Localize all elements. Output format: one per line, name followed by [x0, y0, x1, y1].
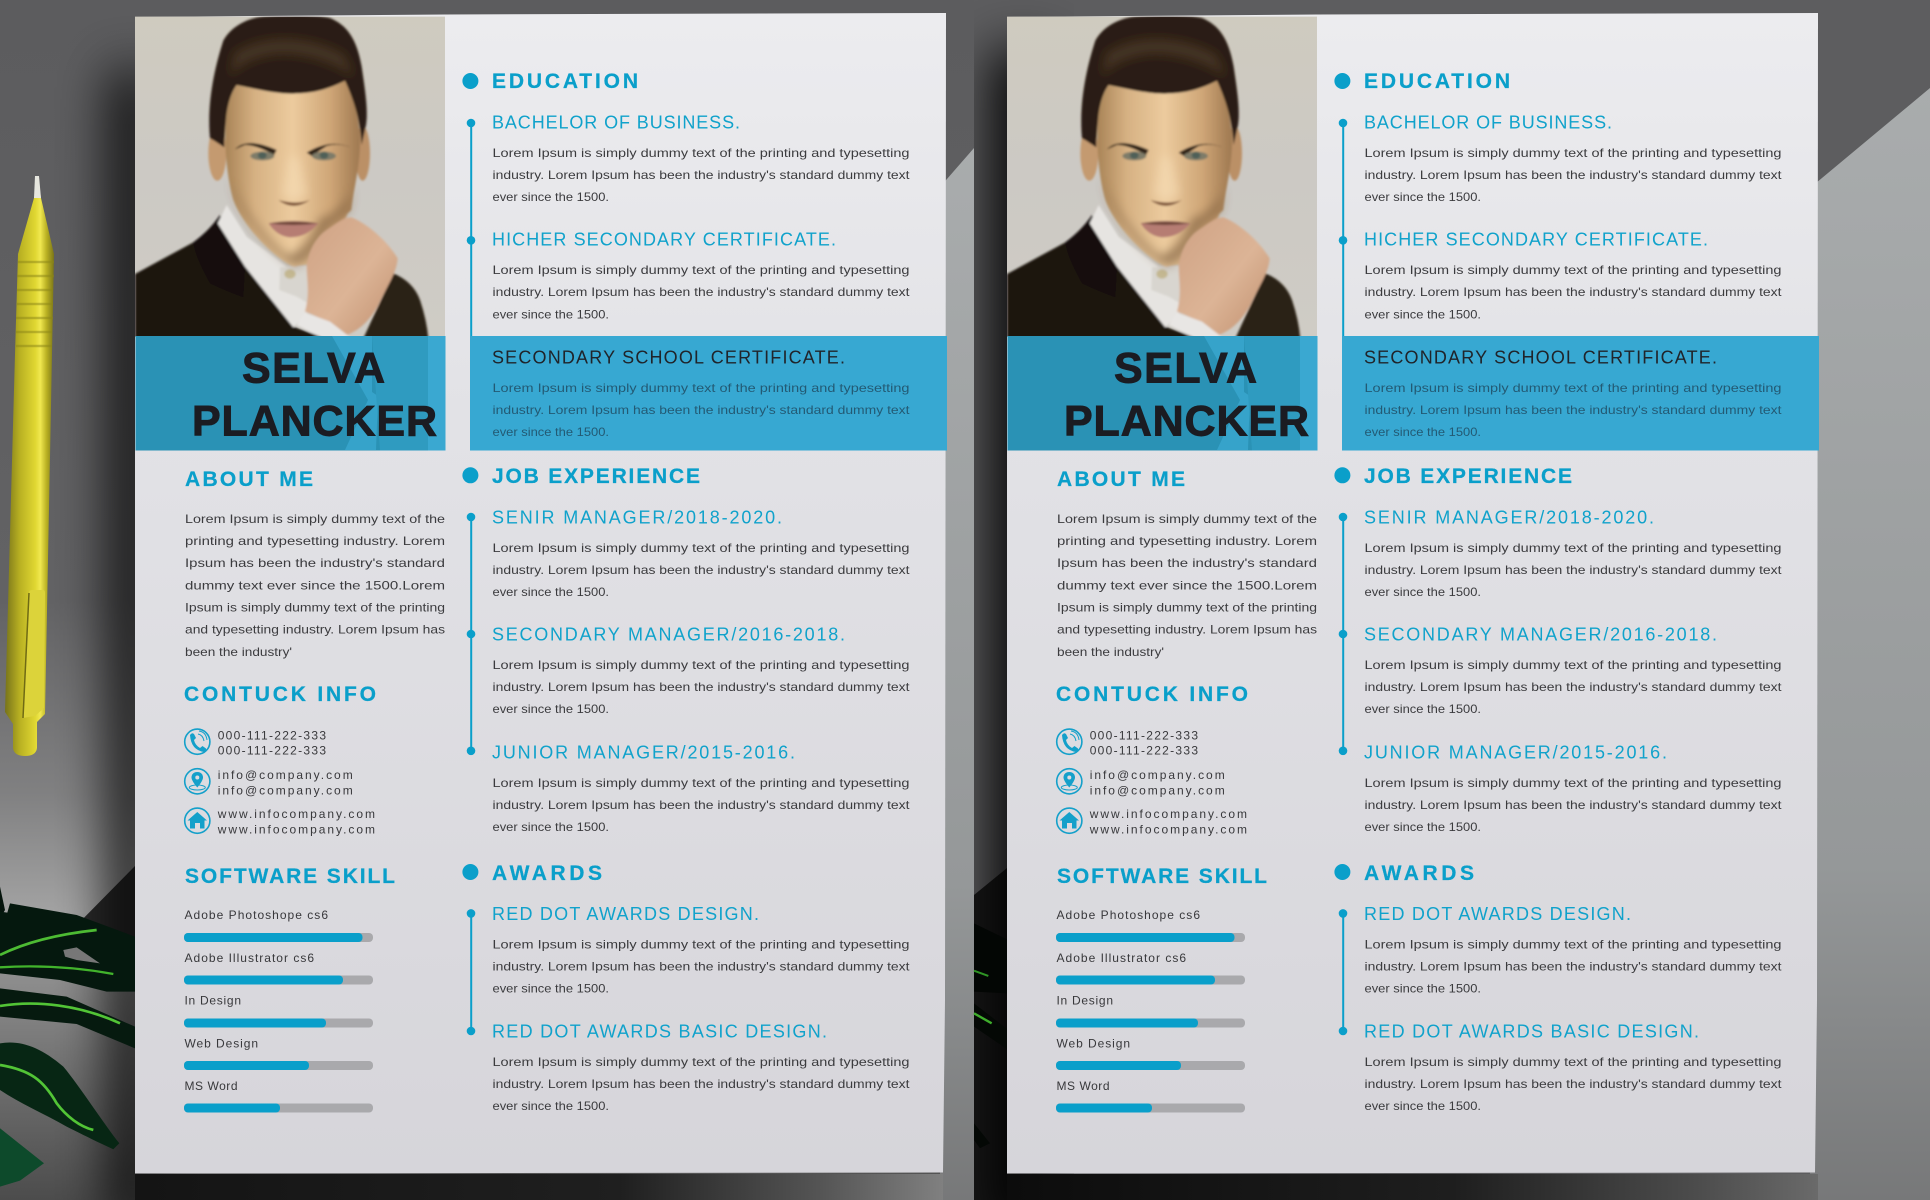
entry: secondary manager: Lorem Ipsum is simply dummy text of the printing and typesetting — [492, 658, 910, 672]
entry: red dot basic design: industry. Lorem Ipsum has been the industry's standard dummy text — [492, 1077, 910, 1091]
entry: bachelor — [492, 113, 910, 204]
text: phone numbers — [1090, 728, 1198, 758]
highlight band behind third education item — [1342, 336, 1819, 450]
text: websites: www.infocompany.com — [1089, 807, 1247, 821]
entry: red dot basic design: ever since the 1500. — [492, 1099, 609, 1113]
entry: higher secondary: industry. Lorem Ipsum has been the industry's standard dummy text — [1364, 285, 1782, 299]
entry: red dot basic design: industry. Lorem Ipsum has been the industry's standard dummy text — [1364, 1077, 1782, 1091]
section: about me — [1057, 468, 1317, 659]
entry: higher secondary: ever since the 1500. — [492, 307, 609, 321]
entry: junior manager — [492, 742, 910, 834]
timeline: job experience — [462, 467, 478, 755]
background: light diagonal wedge, right mockup — [1810, 88, 1930, 1200]
entry: junior manager: Lorem Ipsum is simply dummy text of the printing and typesetting — [492, 776, 910, 790]
entry: secondary manager: SECONDARY MANAGER/2016-2018. — [492, 625, 845, 645]
skill: ms word — [184, 1079, 373, 1112]
entry: higher secondary: industry. Lorem Ipsum has been the industry's standard dummy text — [492, 285, 910, 299]
heading: job experience: JOB EXPERIENCE — [1364, 465, 1572, 488]
entry: secondary manager — [1364, 625, 1782, 716]
entry: secondary school: ever since the 1500. — [492, 425, 609, 439]
panel: right resume sheet — [1007, 13, 1819, 1174]
timeline: education — [1334, 73, 1350, 336]
heading: job experience: JOB EXPERIENCE — [492, 465, 700, 488]
skill: ms word: MS Word — [1056, 1079, 1110, 1093]
text: emails: info@company.com — [218, 768, 353, 782]
entry: higher secondary: Lorem Ipsum is simply dummy text of the printing and typesetting — [1364, 263, 1782, 277]
text block: about me: Ipsum is simply dummy text of the printing — [1057, 600, 1317, 614]
entry: red dot design: Lorem Ipsum is simply dummy text of the printing and typesetting — [1364, 937, 1782, 951]
entry: red dot basic design: RED DOT AWARDS BASIC DESIGN. — [1364, 1021, 1699, 1041]
text: websites: www.infocompany.com — [1089, 822, 1247, 836]
heading: software skill: SOFTWARE SKILL — [185, 865, 395, 888]
icon: monstera leaf behind right mockup — [974, 923, 1008, 1148]
text: emails: info@company.com — [1090, 783, 1225, 797]
text: phone numbers: 000-111-222-333 — [1090, 728, 1198, 742]
entry: junior manager: ever since the 1500. — [492, 820, 609, 834]
text: websites — [1089, 807, 1247, 836]
heading: awards: AWARDS — [1364, 862, 1474, 885]
entry: red dot basic design: RED DOT AWARDS BASIC DESIGN. — [492, 1021, 827, 1041]
text block: about me: dummy text ever since the 1500.Lorem — [1057, 578, 1317, 592]
entry: red dot design: industry. Lorem Ipsum has been the industry's standard dummy text — [1364, 959, 1782, 973]
background: dark desk surface — [0, 0, 974, 1200]
text block: about me: and typesetting industry. Lorem Ipsum has — [1057, 623, 1317, 637]
skill: in design: In Design — [1056, 994, 1113, 1008]
entry: bachelor — [1364, 113, 1782, 204]
heading: about me: ABOUT ME — [1057, 468, 1185, 491]
section: contact info — [184, 683, 376, 836]
paper sheet — [135, 13, 946, 1174]
text block: about me: Ipsum has been the industry's standard — [1057, 556, 1317, 570]
heading: about me: ABOUT ME — [185, 468, 313, 491]
entry: bachelor: Lorem Ipsum is simply dummy text of the printing and typesetting — [1364, 146, 1782, 160]
section: software skill — [1056, 865, 1267, 1112]
section: education — [462, 70, 910, 439]
name heading: SELVA — [242, 345, 385, 393]
entry: secondary manager: ever since the 1500. — [1364, 702, 1481, 716]
skill: illustrator: Adobe Illustrator cs6 — [1056, 951, 1186, 965]
heading: awards: AWARDS — [492, 862, 602, 885]
icon: monstera leaf left — [0, 887, 135, 1187]
text block: about me — [1057, 512, 1317, 659]
entry: red dot design: ever since the 1500. — [492, 982, 609, 996]
icon: house — [185, 808, 210, 833]
entry: senior manager: ever since the 1500. — [1364, 585, 1481, 599]
icon: location pin — [1057, 769, 1082, 794]
timeline: awards — [462, 864, 478, 1035]
skill: web design: Web Design — [184, 1036, 258, 1050]
heading: education: EDUCATION — [492, 70, 638, 93]
skill: photoshop: Adobe Photoshope cs6 — [1056, 908, 1200, 922]
entry: red dot basic design: ever since the 1500. — [1364, 1099, 1481, 1113]
name band — [136, 336, 446, 450]
entry: junior manager: Lorem Ipsum is simply dummy text of the printing and typesetting — [1364, 776, 1782, 790]
entry: red dot design: ever since the 1500. — [1364, 982, 1481, 996]
text: websites: www.infocompany.com — [217, 807, 375, 821]
name heading — [192, 345, 437, 445]
panel: left resume sheet — [135, 13, 947, 1174]
text block: about me: and typesetting industry. Lorem Ipsum has — [185, 623, 445, 637]
skill: in design: In Design — [184, 994, 241, 1008]
text: phone numbers: 000-111-222-333 — [1090, 744, 1198, 758]
entry: secondary manager — [492, 625, 910, 716]
skill: ms word — [1056, 1079, 1245, 1112]
entry: secondary school: Lorem Ipsum is simply dummy text of the printing and typesetting — [492, 381, 910, 395]
entry: secondary manager: SECONDARY MANAGER/2016-2018. — [1364, 625, 1717, 645]
entry: junior manager: industry. Lorem Ipsum has been the industry's standard dummy text — [492, 798, 910, 812]
entry: red dot design: industry. Lorem Ipsum has been the industry's standard dummy text — [492, 959, 910, 973]
skill: in design — [184, 994, 373, 1028]
skill: photoshop: Adobe Photoshope cs6 — [184, 908, 328, 922]
skill: ms word: MS Word — [184, 1079, 238, 1093]
entry: junior manager: ever since the 1500. — [1364, 820, 1481, 834]
entry: higher secondary — [1364, 230, 1782, 321]
timeline: awards — [1334, 864, 1350, 1035]
section: contact info — [1056, 683, 1248, 836]
skill: illustrator — [184, 951, 373, 984]
entry: higher secondary: Lorem Ipsum is simply dummy text of the printing and typesetting — [492, 263, 910, 277]
icon: house — [1057, 808, 1082, 833]
entry: higher secondary: HICHER SECONDARY CERTIFICATE. — [1364, 230, 1708, 250]
section: awards — [1334, 862, 1782, 1113]
name band — [1008, 336, 1318, 450]
text: emails: info@company.com — [218, 783, 353, 797]
entry: red dot design: Lorem Ipsum is simply dummy text of the printing and typesetting — [492, 937, 910, 951]
name heading: PLANCKER — [192, 397, 437, 445]
entry: secondary school — [492, 348, 910, 439]
section: education — [1334, 70, 1782, 439]
name heading — [1064, 345, 1309, 445]
highlight band behind third education item — [470, 336, 947, 450]
text block: about me: been the industry' — [1057, 645, 1164, 659]
skill: photoshop — [184, 908, 373, 942]
paper sheet — [1007, 13, 1818, 1174]
entry: senior manager: SENIR MANAGER/2018-2020. — [1364, 508, 1654, 528]
background: light diagonal wedge, left mockup — [940, 148, 974, 1200]
text block: about me: dummy text ever since the 1500.Lorem — [185, 578, 445, 592]
entry: red dot basic design — [492, 1021, 910, 1113]
shadow: strip under right paper — [1007, 1174, 1818, 1200]
text block: about me: Ipsum is simply dummy text of the printing — [185, 600, 445, 614]
text block: about me — [185, 512, 445, 659]
skill: in design — [1056, 994, 1245, 1028]
icon: phone — [1057, 729, 1082, 754]
name heading: SELVA — [1114, 345, 1257, 393]
entry: red dot basic design: Lorem Ipsum is simply dummy text of the printing and typesetting — [492, 1055, 910, 1069]
entry: secondary school: industry. Lorem Ipsum has been the industry's standard dummy text — [492, 403, 910, 417]
entry: senior manager: ever since the 1500. — [492, 585, 609, 599]
heading: software skill: SOFTWARE SKILL — [1057, 865, 1267, 888]
skill: web design — [1056, 1036, 1245, 1070]
entry: bachelor: BACHELOR OF BUSINESS. — [1364, 113, 1612, 133]
timeline: job experience — [1334, 467, 1350, 755]
text: emails — [1090, 768, 1225, 797]
entry: senior manager — [1364, 508, 1782, 599]
entry: secondary school: industry. Lorem Ipsum has been the industry's standard dummy text — [1364, 403, 1782, 417]
section: about me — [185, 468, 445, 659]
entry: bachelor: BACHELOR OF BUSINESS. — [492, 113, 740, 133]
entry: junior manager: industry. Lorem Ipsum has been the industry's standard dummy text — [1364, 798, 1782, 812]
text: phone numbers: 000-111-222-333 — [218, 744, 326, 758]
text: emails: info@company.com — [1090, 768, 1225, 782]
skill: web design — [184, 1036, 373, 1070]
entry: bachelor: ever since the 1500. — [492, 190, 609, 204]
shadow: left mockup side — [112, 70, 152, 1200]
entry: secondary school — [1364, 348, 1782, 439]
section: awards — [462, 862, 910, 1113]
entry: higher secondary: ever since the 1500. — [1364, 307, 1481, 321]
icon: location pin — [185, 769, 210, 794]
section: job experience — [462, 465, 910, 834]
text: websites: www.infocompany.com — [217, 822, 375, 836]
entry: senior manager: industry. Lorem Ipsum has been the industry's standard dummy text — [492, 563, 910, 577]
photo: portrait of man in dark suit — [1007, 13, 1317, 338]
text: emails — [218, 768, 353, 797]
timeline: education — [462, 73, 478, 336]
entry: red dot design — [492, 904, 910, 996]
text block: about me: Ipsum has been the industry's standard — [185, 556, 445, 570]
entry: secondary manager: industry. Lorem Ipsum has been the industry's standard dummy text — [492, 680, 910, 694]
entry: higher secondary: HICHER SECONDARY CERTIFICATE. — [492, 230, 836, 250]
name heading: PLANCKER — [1064, 397, 1309, 445]
entry: secondary manager: industry. Lorem Ipsum has been the industry's standard dummy text — [1364, 680, 1782, 694]
entry: red dot basic design: Lorem Ipsum is simply dummy text of the printing and typesetting — [1364, 1055, 1782, 1069]
entry: junior manager: JUNIOR MANAGER/2015-2016. — [492, 742, 795, 762]
entry: junior manager: JUNIOR MANAGER/2015-2016. — [1364, 742, 1667, 762]
entry: secondary manager: Lorem Ipsum is simply dummy text of the printing and typesetting — [1364, 658, 1782, 672]
icon: yellow pen — [5, 176, 54, 756]
text: websites — [217, 807, 375, 836]
entry: secondary school: SECONDARY SCHOOL CERTIFICATE. — [492, 348, 845, 368]
entry: bachelor: Lorem Ipsum is simply dummy text of the printing and typesetting — [492, 146, 910, 160]
entry: secondary school: SECONDARY SCHOOL CERTIFICATE. — [1364, 348, 1717, 368]
shadow: right mockup side — [992, 50, 1052, 1200]
text: phone numbers: 000-111-222-333 — [218, 728, 326, 742]
entry: red dot basic design — [1364, 1021, 1782, 1113]
background: dark diagonal wedge beside right mockup — [974, 868, 1007, 1200]
entry: secondary school: Lorem Ipsum is simply dummy text of the printing and typesetting — [1364, 381, 1782, 395]
entry: junior manager — [1364, 742, 1782, 834]
text block: about me: printing and typesetting industry. Lorem — [185, 534, 445, 548]
skill: web design: Web Design — [1056, 1036, 1130, 1050]
skill: photoshop — [1056, 908, 1245, 942]
section: software skill — [184, 865, 395, 1112]
entry: bachelor: industry. Lorem Ipsum has been the industry's standard dummy text — [492, 168, 910, 182]
entry: red dot design — [1364, 904, 1782, 996]
entry: bachelor: ever since the 1500. — [1364, 190, 1481, 204]
entry: red dot design: RED DOT AWARDS DESIGN. — [492, 904, 759, 924]
photo: portrait of man in dark suit — [135, 13, 445, 338]
entry: higher secondary — [492, 230, 910, 321]
section: job experience — [1334, 465, 1782, 834]
entry: secondary school: ever since the 1500. — [1364, 425, 1481, 439]
text block: about me: printing and typesetting industry. Lorem — [1057, 534, 1317, 548]
text block: about me: been the industry' — [185, 645, 292, 659]
entry: senior manager: Lorem Ipsum is simply dummy text of the printing and typesetting — [492, 541, 910, 555]
background: dark diagonal wedge lower left — [70, 866, 135, 990]
entry: bachelor: industry. Lorem Ipsum has been the industry's standard dummy text — [1364, 168, 1782, 182]
entry: senior manager — [492, 508, 910, 599]
entry: senior manager: Lorem Ipsum is simply dummy text of the printing and typesetting — [1364, 541, 1782, 555]
skill: illustrator: Adobe Illustrator cs6 — [184, 951, 314, 965]
heading: contact info: CONTUCK INFO — [1056, 683, 1248, 706]
icon: phone — [185, 729, 210, 754]
text: phone numbers — [218, 728, 326, 758]
background: right surface — [974, 0, 1930, 1200]
text block: about me: Lorem Ipsum is simply dummy text of the — [185, 512, 445, 526]
heading: education: EDUCATION — [1364, 70, 1510, 93]
heading: contact info: CONTUCK INFO — [184, 683, 376, 706]
entry: red dot design: RED DOT AWARDS DESIGN. — [1364, 904, 1631, 924]
skill: illustrator — [1056, 951, 1245, 984]
text block: about me: Lorem Ipsum is simply dummy text of the — [1057, 512, 1317, 526]
entry: senior manager: SENIR MANAGER/2018-2020. — [492, 508, 782, 528]
entry: senior manager: industry. Lorem Ipsum has been the industry's standard dummy text — [1364, 563, 1782, 577]
entry: secondary manager: ever since the 1500. — [492, 702, 609, 716]
shadow: strip under left paper — [135, 1174, 943, 1200]
